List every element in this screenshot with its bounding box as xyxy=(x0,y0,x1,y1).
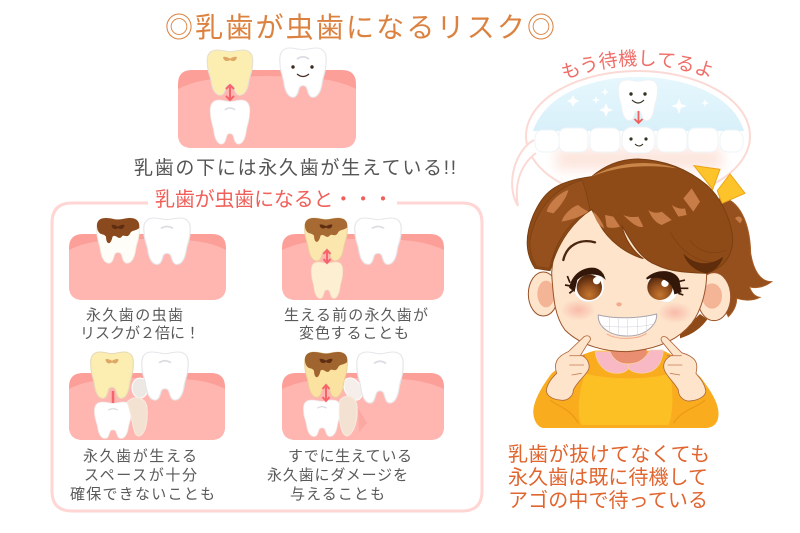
decayed tooth xyxy=(97,218,139,263)
hair back and top xyxy=(527,159,733,273)
ear left xyxy=(528,272,558,316)
lower gum glow xyxy=(556,148,722,170)
face xyxy=(552,203,707,352)
bow xyxy=(694,166,745,203)
arrow xyxy=(226,85,234,100)
discolored permanent tooth xyxy=(311,262,343,299)
thought bubble xyxy=(512,71,750,206)
top sheen xyxy=(592,163,677,177)
neck xyxy=(610,347,647,363)
yellow tooth xyxy=(91,352,133,398)
ponytail xyxy=(707,197,772,317)
title: ◎乳歯が虫歯になるリスク◎ xyxy=(165,12,555,43)
left eye xyxy=(565,268,604,302)
caption: 確保できないことも xyxy=(70,486,215,503)
caption: 永久歯が生える xyxy=(83,448,197,465)
small displaced tooth xyxy=(340,375,366,403)
sparkles xyxy=(567,88,709,117)
left lock lighter tone xyxy=(530,180,590,268)
panel: damage to erupted teeth xyxy=(267,352,444,503)
arrow xyxy=(634,111,642,123)
blush xyxy=(561,299,692,323)
white permanent tooth xyxy=(303,400,341,437)
right eye xyxy=(647,272,688,302)
caption: 変色することも xyxy=(299,325,409,342)
hair bang shading xyxy=(552,208,727,268)
decayed yellow tooth xyxy=(305,218,347,261)
smiling front tooth xyxy=(622,127,655,153)
sleeve seams xyxy=(550,400,705,423)
arrow xyxy=(324,250,330,263)
white tooth xyxy=(355,218,401,264)
row of teeth xyxy=(535,128,743,152)
arrow xyxy=(112,391,114,403)
smile xyxy=(598,314,657,338)
white tooth xyxy=(357,352,403,403)
bubble tail xyxy=(512,140,536,206)
white tooth xyxy=(142,352,188,400)
beige neighbouring tooth xyxy=(339,396,357,436)
left hand xyxy=(546,336,590,400)
outer panel frame xyxy=(52,203,482,511)
top gum illustration xyxy=(178,48,356,148)
nose xyxy=(616,302,622,306)
caption: 永久歯の虫歯 xyxy=(86,307,183,324)
sweater body highlight xyxy=(579,373,672,425)
caption: すでに生えている xyxy=(288,448,412,465)
panel: not enough space xyxy=(69,352,225,503)
blue sky area xyxy=(533,77,744,131)
damage mark xyxy=(358,408,367,432)
arrow xyxy=(322,385,330,401)
caption: 与えることも xyxy=(290,486,385,503)
smiling tooth xyxy=(280,48,326,97)
explanatory text: 乳歯が抜けてなくても xyxy=(508,443,710,466)
caption: リスクが２倍に！ xyxy=(80,325,200,342)
white tooth xyxy=(144,218,190,264)
decayed tooth xyxy=(305,352,347,397)
girl character xyxy=(527,159,772,428)
caption: スペースが十分 xyxy=(84,467,197,484)
yellow baby tooth xyxy=(207,50,253,95)
white permanent tooth xyxy=(94,402,132,439)
subheading: 乳歯の下には永久歯が生えている!! xyxy=(134,157,456,179)
panel: permanent tooth decay risk xyxy=(69,218,226,342)
collar xyxy=(595,350,663,373)
waiting permanent tooth xyxy=(618,80,658,121)
explanatory text: アゴの中で待っている xyxy=(508,489,708,512)
hair highlights xyxy=(547,188,742,228)
explanatory text: 永久歯は既に待機して xyxy=(508,466,708,489)
caption: 永久歯にダメージを xyxy=(267,467,408,484)
permanent tooth below xyxy=(210,100,250,144)
bubble caption: もう待機してるよ xyxy=(562,49,712,78)
small displaced tooth xyxy=(132,378,148,398)
eyebrow xyxy=(563,241,595,260)
dark hair layer xyxy=(683,253,723,273)
sweater xyxy=(533,351,719,428)
ear right xyxy=(697,273,731,321)
hair wisp at jaw xyxy=(680,314,707,338)
panel: discoloration before eruption xyxy=(282,218,444,342)
caption: 生える前の永久歯が xyxy=(284,307,428,324)
beige neighbouring tooth xyxy=(127,398,147,436)
right hand xyxy=(661,337,706,401)
panel heading: 乳歯が虫歯になると・・・ xyxy=(155,188,393,211)
